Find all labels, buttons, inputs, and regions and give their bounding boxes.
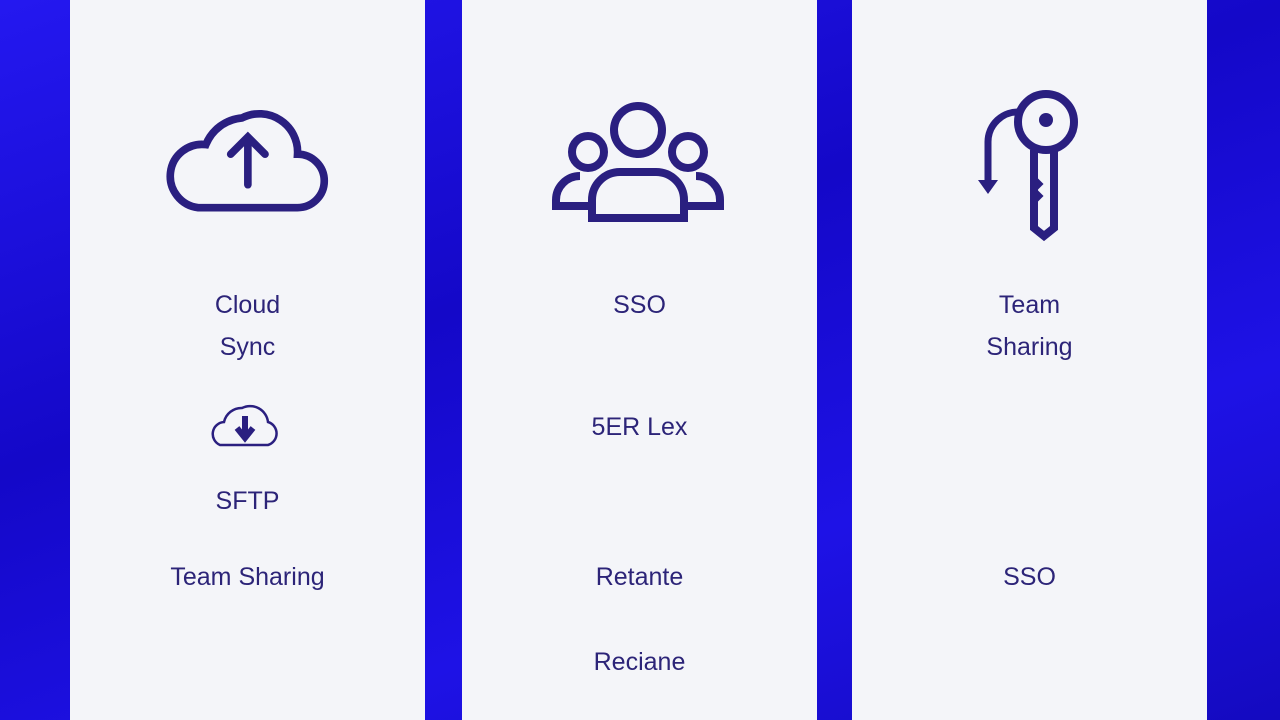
panel: cloud sync xyxy=(70,0,425,720)
icon: users group xyxy=(552,102,724,222)
label: Reciane: Reciane xyxy=(594,648,685,676)
label: team sharing: Team xyxy=(999,291,1060,319)
label: cloud sync: Sync xyxy=(220,333,275,361)
label: Retante: Retante xyxy=(596,563,683,591)
label: SSO: SSO xyxy=(1003,563,1056,591)
label: team sharing: Sharing xyxy=(986,333,1073,361)
panel: SSO xyxy=(462,0,817,720)
label: cloud sync xyxy=(215,291,280,361)
label: 5ER Lex: 5ER Lex xyxy=(592,413,687,441)
label: SFTP: SFTP xyxy=(216,487,279,515)
label: team sharing: Team Sharing xyxy=(170,563,325,591)
label: SSO: SSO xyxy=(613,291,666,319)
label: cloud sync: Cloud xyxy=(215,291,280,319)
panel: team sharing xyxy=(852,0,1207,720)
icon: key with arrow xyxy=(978,90,1078,241)
label: team sharing xyxy=(986,291,1073,361)
icon: cloud upload xyxy=(166,110,328,212)
icon: cloud download xyxy=(212,404,278,446)
